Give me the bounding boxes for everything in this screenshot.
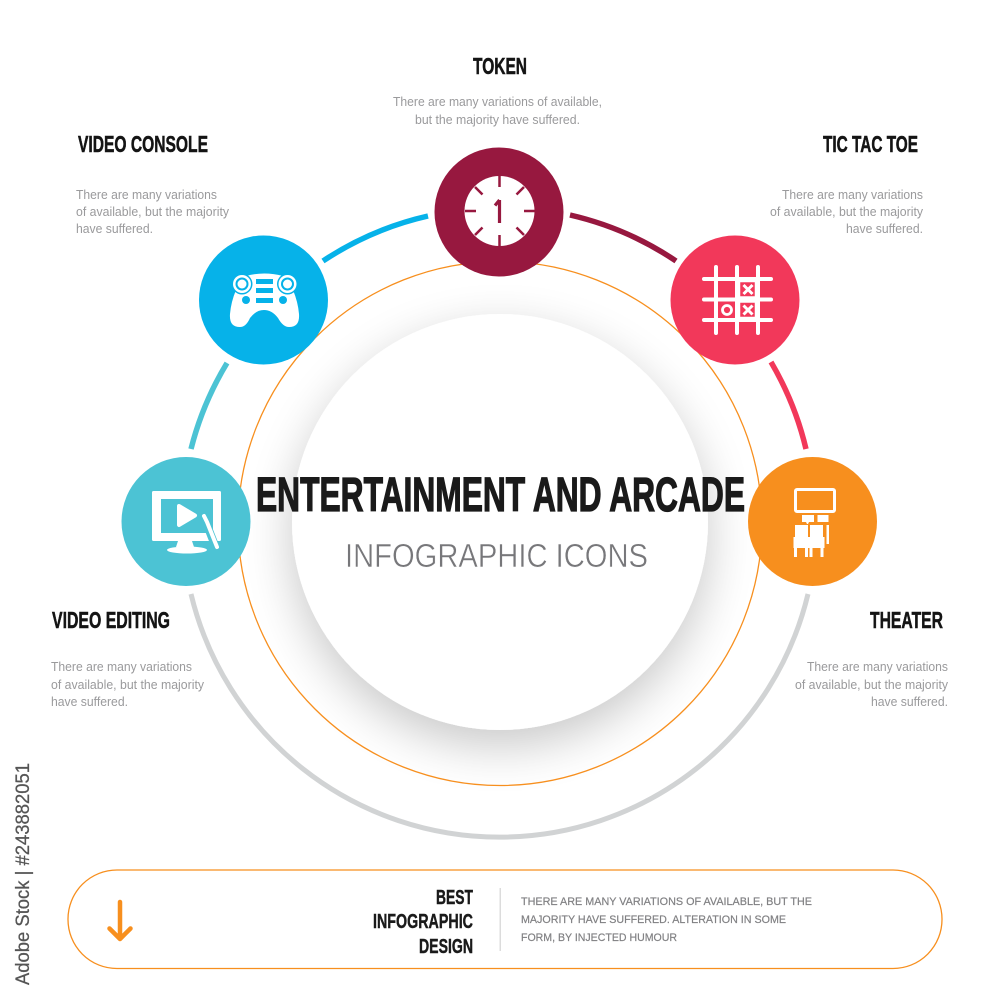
heading: tic tac toe: TIC TAC TOE [823, 131, 918, 157]
icon: token clock [464, 176, 535, 246]
node: video editing [122, 457, 250, 586]
description: tic tac toe [770, 188, 924, 236]
vertical stock credit: Adobe Stock | #243882051 [12, 763, 34, 985]
panel text: THERE ARE MANY VARIATIONS OF AVAILABLE, BUT THE [521, 896, 812, 908]
heading: video console: VIDEO CONSOLE [78, 131, 208, 157]
icon: video editing monitor [152, 491, 221, 554]
heading: video editing: VIDEO EDITING [52, 607, 170, 633]
panel text: MAJORITY HAVE SUFFERED. ALTERATION IN SOME [521, 914, 786, 926]
description: video editing: have suffered. [51, 695, 128, 709]
description: video console: There are many variations [76, 188, 217, 202]
description: token [393, 95, 602, 127]
title: ENTERTAINMENT AND ARCADE [256, 469, 745, 522]
icon: tic tac toe grid [704, 267, 771, 333]
description: tic tac toe: have suffered. [846, 222, 923, 236]
node: theater [748, 457, 877, 586]
description: theater: have suffered. [871, 695, 948, 709]
node: video console [199, 236, 328, 364]
panel text: FORM, BY INJECTED HUMOUR [521, 932, 677, 944]
panel text [521, 896, 812, 944]
description: video editing [51, 660, 205, 709]
description: video console: have suffered. [76, 222, 153, 236]
icon: down arrow [110, 902, 130, 939]
node: tic tac toe [670, 236, 800, 364]
description: video console: of available, but the majority [76, 205, 230, 219]
orange inner ring [238, 262, 762, 786]
heading: token: TOKEN [473, 53, 527, 79]
central disc with soft shadow [292, 314, 708, 730]
bottom panel [68, 870, 942, 968]
description: video editing: of available, but the majority [51, 678, 205, 692]
description: tic tac toe: There are many variations [782, 188, 923, 202]
heading: theater: THEATER [870, 607, 943, 633]
description: token: There are many variations of available, [393, 95, 602, 109]
panel heading: INFOGRAPHIC [373, 910, 473, 933]
description: theater: There are many variations [807, 660, 948, 674]
description: theater: of available, but the majority [795, 678, 949, 692]
description: theater [795, 660, 949, 709]
node: token [434, 148, 564, 276]
description: video console [76, 188, 230, 236]
description: tic tac toe: of available, but the majority [770, 205, 924, 219]
panel heading [373, 886, 473, 958]
subtitle: INFOGRAPHIC ICONS [345, 537, 648, 574]
icon: game controller [230, 274, 299, 327]
outer ring arcs [191, 215, 808, 837]
icon: theater seats and screen [794, 490, 834, 557]
panel heading: DESIGN [419, 935, 473, 958]
description: video editing: There are many variations [51, 660, 192, 674]
description: token: but the majority have suffered. [415, 113, 580, 127]
panel heading: BEST [436, 886, 473, 909]
